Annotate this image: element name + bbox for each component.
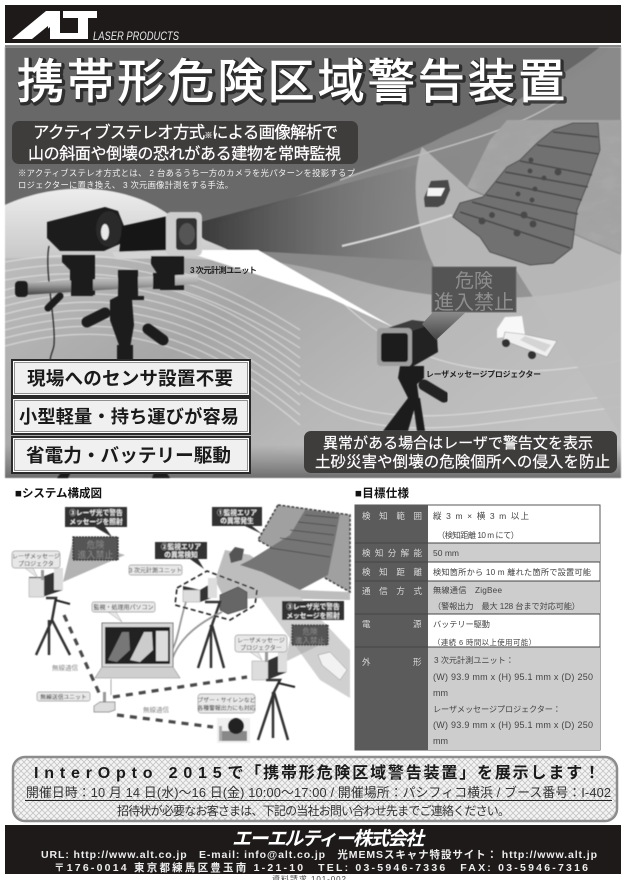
beam and sign 1 xyxy=(63,540,125,582)
light label: 3D unit: 3 次元計測ユニット xyxy=(129,566,182,574)
projector 1 xyxy=(29,568,70,655)
label wireless 2: 無線通信 xyxy=(143,705,170,714)
hero panel background xyxy=(5,47,621,478)
spec table xyxy=(355,505,600,750)
dark label: step 1: の異常発生 xyxy=(220,516,254,525)
row: resolution xyxy=(362,548,459,558)
row: power: （連続 6 時間以上使用可能） xyxy=(433,638,536,647)
row: power xyxy=(362,619,536,647)
projector 3 with sign xyxy=(252,625,330,740)
header bar with logo xyxy=(5,5,621,47)
note text: ※アクティブステレオ方式とは、 2 台あるうち一方のカメラを光パターンを投影するプ xyxy=(18,168,356,178)
label wireless 1: 無線通信 xyxy=(52,663,78,672)
car xyxy=(229,547,244,563)
projector 3 with sign: 進入禁止 xyxy=(295,635,325,645)
scan fan on hill xyxy=(416,147,621,435)
row: resolution: 50 mm xyxy=(433,548,459,558)
light label: projector right: レーザメッセージ xyxy=(237,638,285,644)
camera left xyxy=(47,207,124,251)
dark label: step 3 left: ③レーザ光で警告 xyxy=(69,508,123,517)
light label: buzzer xyxy=(198,694,256,713)
row: dimensions: 3 次元計測ユニット： xyxy=(434,655,514,665)
company footer: URL: http://www.alt.co.jp E-mail: info@alt.co.jp 光MEMSスキャナ特設サイト： http://www.alt.jp xyxy=(41,848,597,861)
tripod head xyxy=(110,270,144,348)
light beams xyxy=(215,550,350,600)
dark label: step 3 left: メッセージを照射 xyxy=(69,517,123,526)
note text: ロジェクターに置き換え、 3 次元画像計測をする手法。 xyxy=(18,180,233,190)
dark label: step 3 right: メッセージを照射 xyxy=(286,611,340,620)
system diagram: 進入禁止 xyxy=(77,549,114,560)
hill image xyxy=(453,120,621,265)
warning sign projected xyxy=(432,267,516,314)
row: detection range: 検知範囲 xyxy=(362,511,422,521)
camera right xyxy=(119,216,168,254)
row: detection range: （検知距離 10 m にて） xyxy=(437,530,519,540)
light label: buzzer: 各種警報出力にも対応 xyxy=(198,704,256,712)
logo: ALT xyxy=(12,11,97,39)
row: dimensions: レーザメッセージプロジェクター： xyxy=(433,705,561,714)
monitored hill xyxy=(240,505,350,592)
white beam to projector xyxy=(180,250,395,328)
row: power: バッテリー駆動 xyxy=(433,620,490,629)
logo subtitle: LASER PRODUCTS xyxy=(93,31,179,43)
system diagram: 危険 xyxy=(86,539,105,550)
dark label: step 2: の異常検知 xyxy=(164,550,198,559)
row: dimensions: (W) 93.9 mm x (H) 95.1 mm x (D) 250 xyxy=(433,672,593,682)
heading: target specs: ■目標仕様 xyxy=(355,486,410,500)
feature: no sensors xyxy=(12,360,250,396)
icon: car xyxy=(424,180,450,207)
feature: no sensors: 現場へのセンサ設置不要 xyxy=(27,368,233,389)
row: dimensions xyxy=(362,655,593,746)
system diagram xyxy=(12,505,350,743)
dark label: step 1: ①監視エリア xyxy=(217,508,257,517)
laptop xyxy=(95,623,180,678)
row: dimensions: 外 xyxy=(362,657,371,667)
row: communication xyxy=(362,585,580,611)
row: detection range xyxy=(362,511,529,540)
warning sign projected: 危険 xyxy=(455,270,493,292)
row: dimensions: mm xyxy=(433,736,448,746)
light label: PC xyxy=(92,602,155,622)
feature: battery: 省電力・バッテリー駆動 xyxy=(26,445,231,466)
callout: warning: 土砂災害や倒壊の危険個所への侵入を防止 xyxy=(315,453,610,471)
row: power: 源 xyxy=(413,619,422,629)
row: dimensions: mm xyxy=(433,688,448,698)
row: distance xyxy=(362,567,591,577)
dark label: step 2 xyxy=(155,542,207,569)
company footer: エーエルティー株式会社 xyxy=(232,828,426,850)
callout: active stereo: 山の斜面や倒壊の恐れがある建物を常時監視 xyxy=(28,145,341,163)
company footer xyxy=(5,825,621,874)
feature: battery xyxy=(12,437,250,473)
light label: projector right xyxy=(235,635,287,660)
callout: warning xyxy=(304,431,617,473)
projector beam to sign xyxy=(422,312,466,340)
label: 3D unit: 3 次元計測ユニット xyxy=(190,265,257,275)
feature: light and portable xyxy=(12,398,250,434)
light label: buzzer: ブザー・サイレンなど xyxy=(198,696,256,704)
title: 携帯形危険区域警告装置 xyxy=(17,55,565,108)
row: resolution: 検知分解能 xyxy=(362,548,422,558)
callout: active stereo xyxy=(12,121,358,164)
row: detection range: 縦 3 m × 横 3 m 以上 xyxy=(433,511,529,521)
feature: light and portable: 小型軽量・持ち運びが容易 xyxy=(19,406,239,427)
light label: projector left: レーザメッセージ xyxy=(12,554,60,560)
company footer: 〒176-0014 東京都練馬区豊玉南 1-21-10 TEL: 03-5946-7336 FAX: 03-5946-7316 xyxy=(54,861,588,874)
callout: warning: 異常がある場合はレーザで警告文を表示 xyxy=(323,435,593,452)
label: projector: レーザメッセージプロジェクター xyxy=(426,369,541,379)
dashed selection xyxy=(175,571,257,620)
exhibition notice xyxy=(13,757,617,821)
light label: wireless unit xyxy=(37,692,90,701)
icon: truck xyxy=(497,316,557,359)
light label: 3D unit xyxy=(129,565,182,575)
light label: PC: 監視・処理用パソコン xyxy=(93,604,154,612)
dark label: step 2: ②監視エリア xyxy=(161,542,201,551)
exhibition notice: InterOpto 2015で「携帯形危険区域警告装置」を展示します！ xyxy=(34,763,600,782)
camera 2 with tripod xyxy=(172,578,247,668)
warning sign projected: 進入禁止 xyxy=(434,291,514,314)
row: distance: 検知箇所から 10 m 離れた箇所で設置可能 xyxy=(433,567,591,577)
light label: projector left: プロジェクタ xyxy=(18,560,54,568)
truck xyxy=(318,652,347,680)
light label: wireless unit: 無線送信ユニット xyxy=(40,693,87,701)
light label: projector left xyxy=(12,551,60,578)
note text xyxy=(18,168,356,190)
row: power: 電 xyxy=(362,619,371,629)
row: communication: 無線通信 ZigBee xyxy=(433,585,502,595)
cone from camera to hill xyxy=(200,148,480,262)
row: communication: 通信方式 xyxy=(362,586,422,596)
light label: projector right: プロジェクター xyxy=(240,644,282,652)
exhibition notice: 招待状が必要なお客さまは、下記の当社お問い合わせ先までご連絡ください。 xyxy=(117,803,510,818)
row: dimensions: 形 xyxy=(413,657,422,667)
wireless unit xyxy=(94,679,115,712)
siren xyxy=(217,718,250,743)
dark label: step 3 right: ③レーザ光で警告 xyxy=(286,602,340,611)
dark label: step 1 xyxy=(212,507,262,534)
callout: active stereo: アクティブステレオ方式※による画像解析で xyxy=(33,123,338,142)
photo: laser message projector on tripod xyxy=(377,320,444,431)
title: 携帯形危険区域警告装置 xyxy=(18,56,566,110)
wireless links xyxy=(64,615,247,727)
heading: system diagram: ■システム構成図 xyxy=(15,486,102,500)
row: communication: （警報出力 最大 128 台まで対応可能） xyxy=(433,601,580,611)
feature boxes xyxy=(12,360,250,473)
projector 3 with sign: 危険 xyxy=(302,626,318,636)
cable xyxy=(48,246,54,362)
row: dimensions: (W) 93.9 mm x (H) 95.1 mm x (D) 250 xyxy=(433,720,593,730)
photo: 3D measurement unit on tripod xyxy=(15,207,202,478)
clamps xyxy=(62,255,95,295)
rod xyxy=(24,274,198,295)
row: distance: 検知距離 xyxy=(362,567,422,577)
dark label: step 3 left xyxy=(65,507,127,537)
exhibition notice: 開催日時：10 月 14 日(水)～16 日(金) 10:00～17:00 / 開催場所：パシフィコ横浜 / ブース番号：I-402 xyxy=(26,785,611,800)
dark label: step 3 right xyxy=(282,601,344,620)
